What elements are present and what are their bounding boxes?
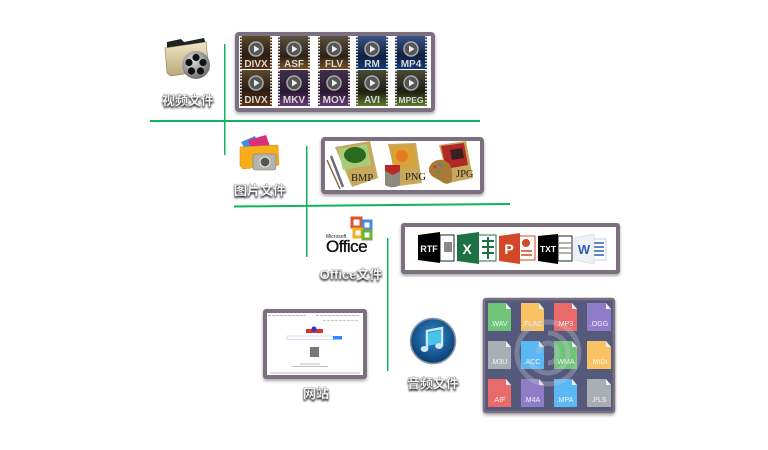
thumb: RM: RM bbox=[364, 59, 380, 70]
icon: TXT bbox=[538, 234, 572, 264]
thumb: RM bbox=[356, 36, 388, 70]
thumb: AVI: AVI bbox=[364, 95, 380, 106]
icon: PowerPoint: P bbox=[504, 241, 514, 257]
watermark: spiral bbox=[517, 322, 579, 384]
icon: iTunes music bbox=[410, 318, 456, 364]
file: FLAC: .FLAC bbox=[522, 321, 542, 328]
thumb: MPEG bbox=[395, 70, 427, 106]
thumb: DIVX bbox=[240, 36, 272, 70]
icon: JPG: JPG bbox=[456, 169, 474, 180]
file: PLS: .PLS bbox=[591, 397, 607, 404]
icon: PNG bbox=[385, 143, 426, 187]
label: audio files: 音频文件 bbox=[407, 376, 459, 391]
file: ACC: .ACC bbox=[524, 359, 540, 366]
icon: TXT: TXT bbox=[540, 244, 557, 254]
file: MIDI: .MIDI bbox=[591, 359, 607, 366]
icon: PowerPoint bbox=[499, 233, 535, 264]
green line: third vertical bbox=[387, 238, 388, 371]
thumb: ASF bbox=[278, 36, 310, 70]
icon: BMP: BMP bbox=[351, 173, 373, 184]
thumb: DIVX second row bbox=[240, 70, 272, 106]
thumb: AVI bbox=[356, 70, 388, 106]
thumb: DIVX: DIVX bbox=[244, 59, 268, 70]
icon: RTF bbox=[418, 232, 454, 263]
label: picture files: 图片文件 bbox=[234, 183, 286, 198]
label: video files: 视频文件 bbox=[162, 93, 214, 108]
icon: BMP bbox=[327, 141, 378, 189]
panel: audio formats bbox=[484, 299, 614, 412]
icon: Word: W bbox=[578, 242, 591, 257]
icon: Microsoft Office logo: Microsoft bbox=[326, 234, 347, 240]
icon: Word bbox=[574, 234, 606, 264]
green line: first vertical bbox=[224, 44, 226, 155]
thumb: ASF: ASF bbox=[284, 59, 304, 70]
thumb: MP4 bbox=[395, 36, 427, 70]
thumb: FLV bbox=[318, 36, 350, 70]
file: WMA: .WMA bbox=[555, 359, 575, 366]
thumb: MOV: MOV bbox=[323, 95, 346, 106]
green line: second horizontal bbox=[234, 204, 510, 206]
icon: Microsoft Office logo: Office bbox=[326, 237, 367, 256]
green line: first horizontal bbox=[150, 120, 480, 122]
file: WAV: .WAV bbox=[490, 321, 508, 328]
file: MP3: .MP3 bbox=[557, 321, 573, 328]
file: M4A: .M4A bbox=[524, 397, 540, 404]
thumb: MKV bbox=[278, 70, 310, 106]
file: MPA: .MPA bbox=[557, 397, 574, 404]
label: Office files: Office文件 bbox=[320, 267, 382, 282]
icon: video folder with film reel bbox=[165, 38, 210, 79]
thumb: MOV bbox=[318, 70, 350, 106]
icon: JPG bbox=[429, 141, 474, 184]
green line: second vertical bbox=[306, 146, 308, 257]
icon: RTF: RTF bbox=[420, 244, 438, 254]
panel: picture formats bbox=[323, 139, 482, 192]
thumb: MP4: MP4 bbox=[401, 59, 422, 70]
thumb: DIVX second row: DIVX bbox=[244, 95, 268, 106]
file: M3U: .M3U bbox=[491, 359, 507, 366]
panel: Office formats bbox=[403, 225, 618, 272]
file: OGG: .OGG bbox=[590, 321, 608, 328]
icon: Microsoft Office logo bbox=[326, 218, 371, 256]
icon: Excel bbox=[457, 232, 496, 264]
label: website: 网站 bbox=[303, 386, 329, 401]
icon: picture folder bbox=[240, 135, 279, 170]
thumb: MKV: MKV bbox=[283, 95, 305, 106]
icon: Excel: X bbox=[462, 241, 472, 257]
panel: website screenshot bbox=[265, 311, 365, 377]
thumb: MPEG: MPEG bbox=[398, 95, 424, 105]
thumb: FLV: FLV bbox=[325, 59, 343, 70]
icon: PNG: PNG bbox=[405, 172, 426, 183]
file: AIF: .AIF bbox=[493, 397, 505, 404]
panel: video formats bbox=[237, 34, 433, 110]
